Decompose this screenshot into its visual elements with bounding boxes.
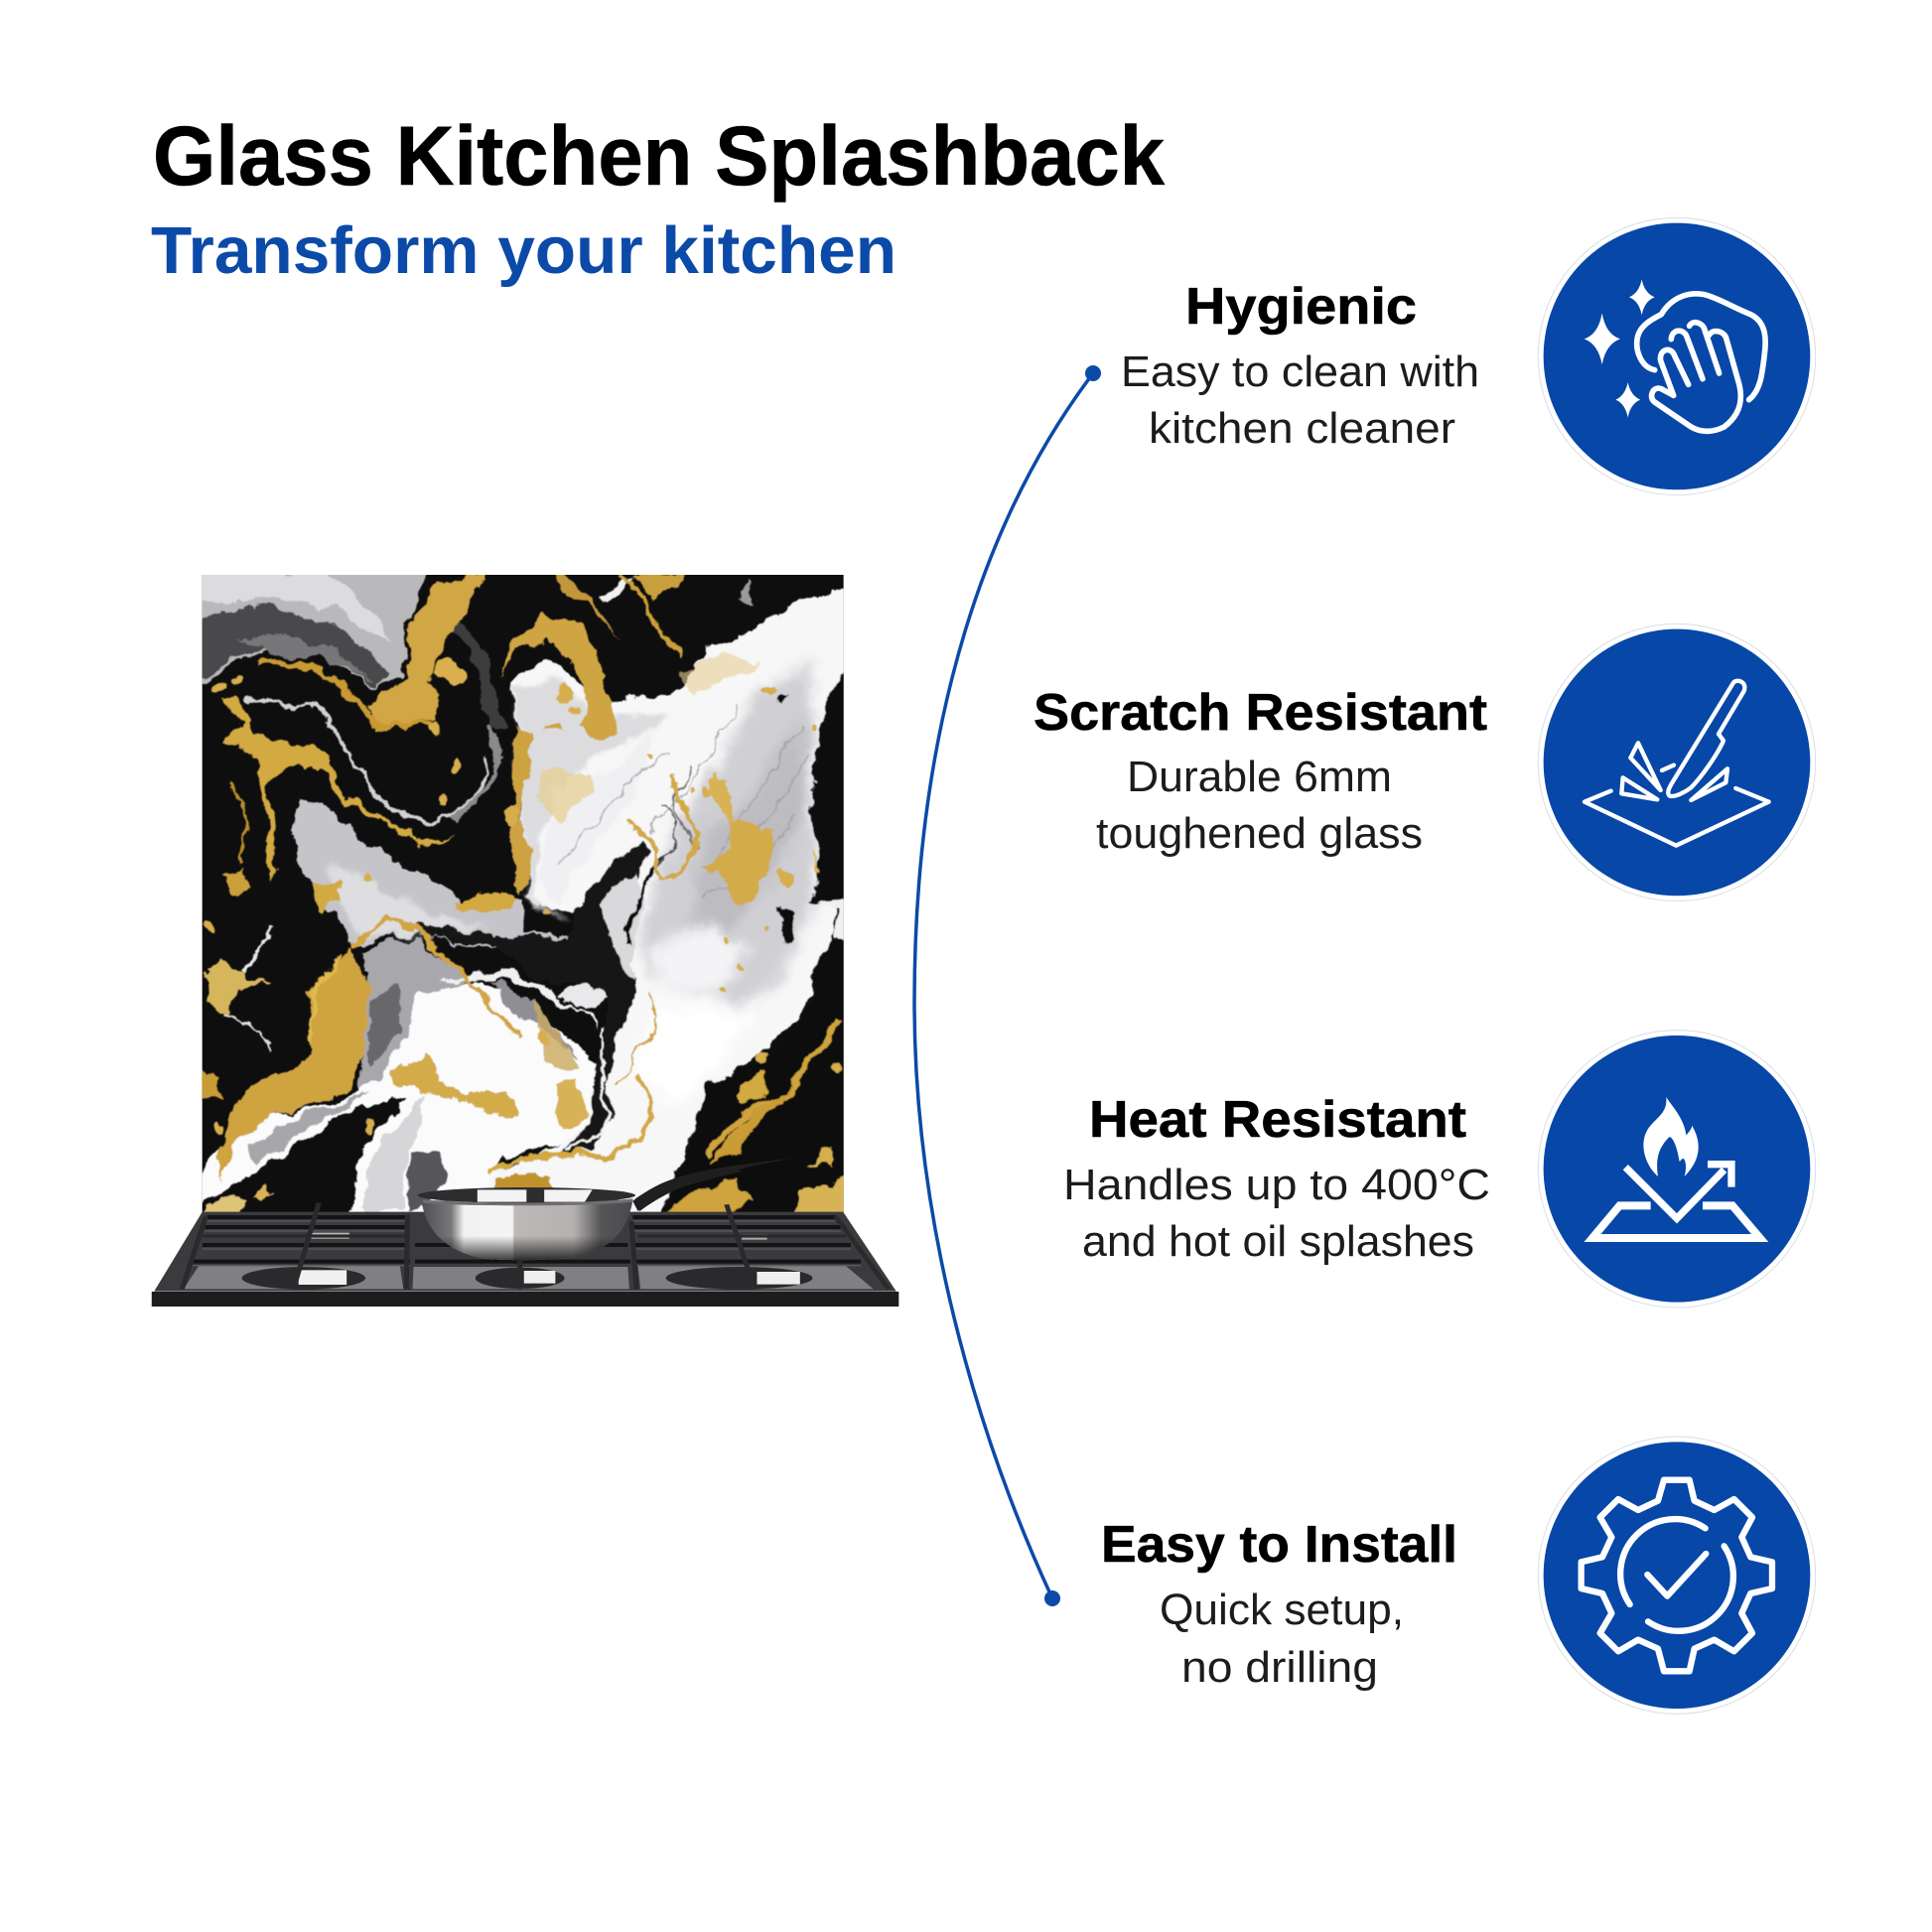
feature text: easy to install — [1101, 1516, 1457, 1692]
icon: flame on heat-deflecting surface — [1538, 1031, 1816, 1308]
feature text: easy to install: Easy to Install — [1101, 1516, 1457, 1574]
right big white region — [427, 581, 857, 1226]
dark grey centre-left wedge — [356, 938, 467, 1097]
icon: knife scratching glass — [1538, 623, 1816, 901]
feature text: easy to install: no drilling — [1181, 1643, 1378, 1692]
black river with streaks — [414, 839, 648, 1157]
contour streaks in the grey field — [560, 705, 808, 903]
hob top plate — [154, 1212, 897, 1292]
feature text: heat resistant: Heat Resistant — [1089, 1091, 1466, 1149]
left grey wedge — [293, 799, 573, 953]
feature text: scratch resistant: Scratch Resistant — [1034, 684, 1487, 742]
feature text: heat resistant: Handles up to 400°C — [1063, 1161, 1490, 1209]
gold splatter — [205, 675, 844, 1168]
feature text: scratch resistant: toughened glass — [1096, 809, 1423, 858]
bottom-right black — [667, 999, 844, 1212]
feature text: hygienic: Hygienic — [1185, 278, 1417, 336]
icon: pan handle — [633, 1158, 792, 1211]
feature text: heat resistant — [1063, 1091, 1490, 1266]
top-left grey swirl — [203, 575, 427, 691]
gold lower middle — [391, 1052, 520, 1117]
gold on right grey — [697, 819, 772, 905]
feature text: heat resistant: and hot oil splashes — [1082, 1217, 1474, 1266]
gold big blob lower left — [220, 948, 367, 1181]
feature text: easy to install: Quick setup, — [1160, 1586, 1404, 1634]
gold top — [365, 571, 484, 730]
feature text: hygienic: Easy to clean with — [1121, 347, 1479, 396]
feature text: hygienic — [1121, 278, 1479, 453]
illustration: gas hob and pan — [151, 1170, 899, 1307]
right edge black wiggle — [808, 672, 844, 999]
icon: hand wiping with sparkles — [1538, 217, 1816, 495]
burner wells — [184, 1266, 874, 1289]
soft grey shading right — [639, 660, 817, 1003]
icon: gear with check mark — [1538, 1437, 1816, 1714]
subtitle: Transform your kitchen — [151, 213, 897, 288]
icon: pan — [418, 1169, 742, 1260]
grates — [193, 1217, 861, 1262]
feature text: scratch resistant: Durable 6mm — [1127, 753, 1392, 801]
burners — [242, 1233, 813, 1290]
title: Glass Kitchen Splashback — [153, 109, 1165, 203]
gold bottom right — [665, 1177, 755, 1212]
central lower white — [192, 978, 600, 1226]
white streaks on black — [245, 697, 488, 824]
feature text: hygienic: kitchen cleaner — [1149, 404, 1455, 453]
gold left arm — [223, 695, 454, 884]
panel: marble splashback — [203, 575, 844, 1213]
feature text: scratch resistant — [1034, 684, 1487, 858]
hob front edge — [152, 1292, 898, 1307]
